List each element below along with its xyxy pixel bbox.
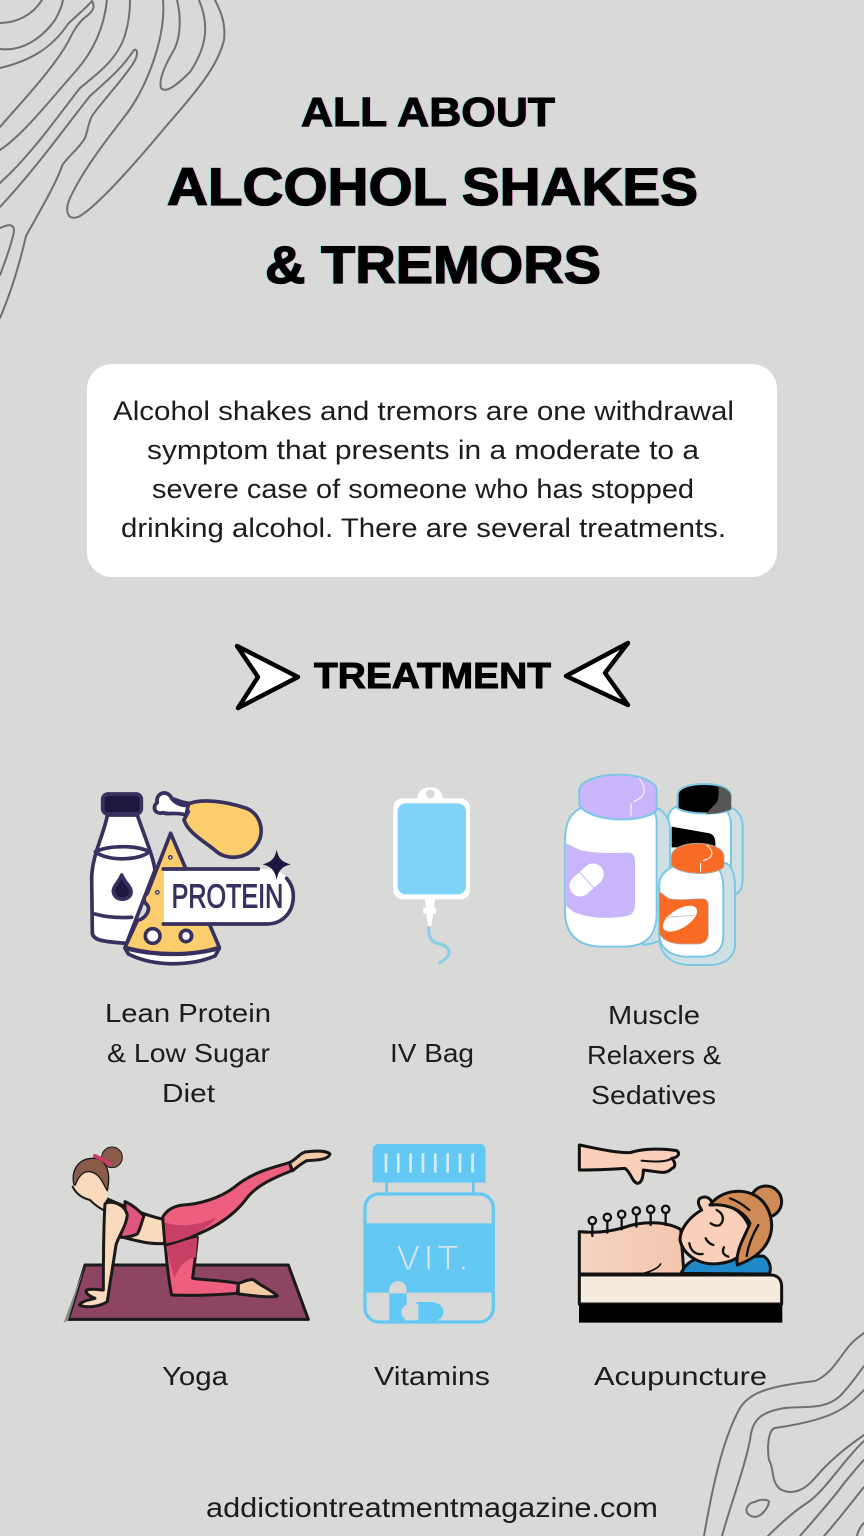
bed base xyxy=(579,1304,782,1323)
hair bun xyxy=(750,1186,782,1217)
title line: all about: ALL ABOUT xyxy=(301,89,555,135)
intro text xyxy=(113,396,734,543)
pills xyxy=(389,1281,407,1322)
label: lean protein: & Low Sugar xyxy=(107,1038,270,1068)
shin and knee xyxy=(165,1237,238,1295)
icon: vitamin bottle xyxy=(365,1144,493,1322)
bottle outline xyxy=(365,1194,493,1322)
label: muscle relaxers and sedatives xyxy=(587,1000,721,1110)
practitioner hand xyxy=(579,1145,679,1183)
sports top xyxy=(120,1202,144,1237)
label: lean protein xyxy=(105,998,271,1108)
intro text: symptom that presents in a moderate to a xyxy=(147,435,699,465)
pillow xyxy=(681,1256,770,1274)
intro text: drinking alcohol. There are several treatments. xyxy=(121,513,726,543)
label: iv bag: IV Bag xyxy=(390,1038,474,1068)
lid xyxy=(373,1144,486,1183)
label: muscle relaxers and sedatives: Relaxers & xyxy=(587,1040,721,1070)
panel: introduction xyxy=(87,364,777,577)
decorative contour lines: bottom right xyxy=(704,1333,864,1536)
decorative contour lines: top left xyxy=(0,0,224,318)
label: acupuncture: Acupuncture xyxy=(594,1361,767,1391)
label: muscle relaxers and sedatives: Muscle xyxy=(608,1000,700,1030)
label: lean protein: Lean Protein xyxy=(105,998,271,1028)
label: muscle relaxers and sedatives: Sedatives xyxy=(591,1080,716,1110)
connector xyxy=(423,899,436,926)
hair xyxy=(710,1191,772,1265)
title line: alcohol shakes: ALCOHOL SHAKES xyxy=(167,158,698,217)
label band xyxy=(366,1223,493,1293)
heading text: TREATMENT xyxy=(314,655,551,696)
icon: iv bag xyxy=(393,787,470,963)
black jar xyxy=(668,784,743,896)
bag shell xyxy=(393,787,470,899)
intro text: severe case of someone who has stopped xyxy=(152,474,694,504)
section heading: treatment xyxy=(237,643,628,708)
torso xyxy=(106,1198,165,1244)
icon: yoga pose xyxy=(63,1147,330,1323)
purple jar backing xyxy=(643,805,670,945)
lower foot xyxy=(238,1280,277,1297)
orange jar xyxy=(659,843,735,965)
raised foot xyxy=(289,1151,330,1171)
sparkle xyxy=(263,849,291,880)
neck xyxy=(387,1183,473,1194)
cheese wedge xyxy=(125,833,219,954)
back xyxy=(579,1223,684,1274)
eyes and mouth xyxy=(689,1210,728,1257)
arm and hand xyxy=(79,1202,127,1307)
label: lean protein: Diet xyxy=(162,1078,216,1108)
raised thigh and calf xyxy=(163,1163,292,1245)
bed mattress xyxy=(579,1275,782,1304)
protein label xyxy=(164,869,293,924)
needles xyxy=(589,1206,669,1236)
hair xyxy=(73,1158,109,1191)
chicken leg xyxy=(155,793,261,857)
icon: protein foods: PROTEIN xyxy=(172,878,283,915)
purple jar xyxy=(565,807,657,947)
pill: white capsule xyxy=(565,859,608,901)
title xyxy=(167,89,698,295)
arrow: left xyxy=(237,646,298,708)
arrow: right xyxy=(566,643,628,705)
label: vitamins: Vitamins xyxy=(374,1361,490,1391)
milk bottle xyxy=(92,815,155,943)
intro text: Alcohol shakes and tremors are one withdrawal xyxy=(113,396,734,426)
icon: protein foods xyxy=(92,793,293,964)
label: yoga: Yoga xyxy=(162,1361,229,1391)
icon: medicine jars xyxy=(565,775,743,965)
icon: acupuncture treatment xyxy=(579,1145,782,1323)
face xyxy=(680,1197,750,1264)
mat xyxy=(68,1265,308,1319)
title line: tremors: & TREMORS xyxy=(265,236,601,295)
vit text: VIT. xyxy=(397,1239,468,1278)
fluid xyxy=(398,803,466,894)
footer website: addictiontreatmentmagazine.com xyxy=(206,1492,658,1523)
hair bun xyxy=(102,1147,122,1168)
neck and face xyxy=(73,1165,107,1208)
tube xyxy=(429,928,449,963)
